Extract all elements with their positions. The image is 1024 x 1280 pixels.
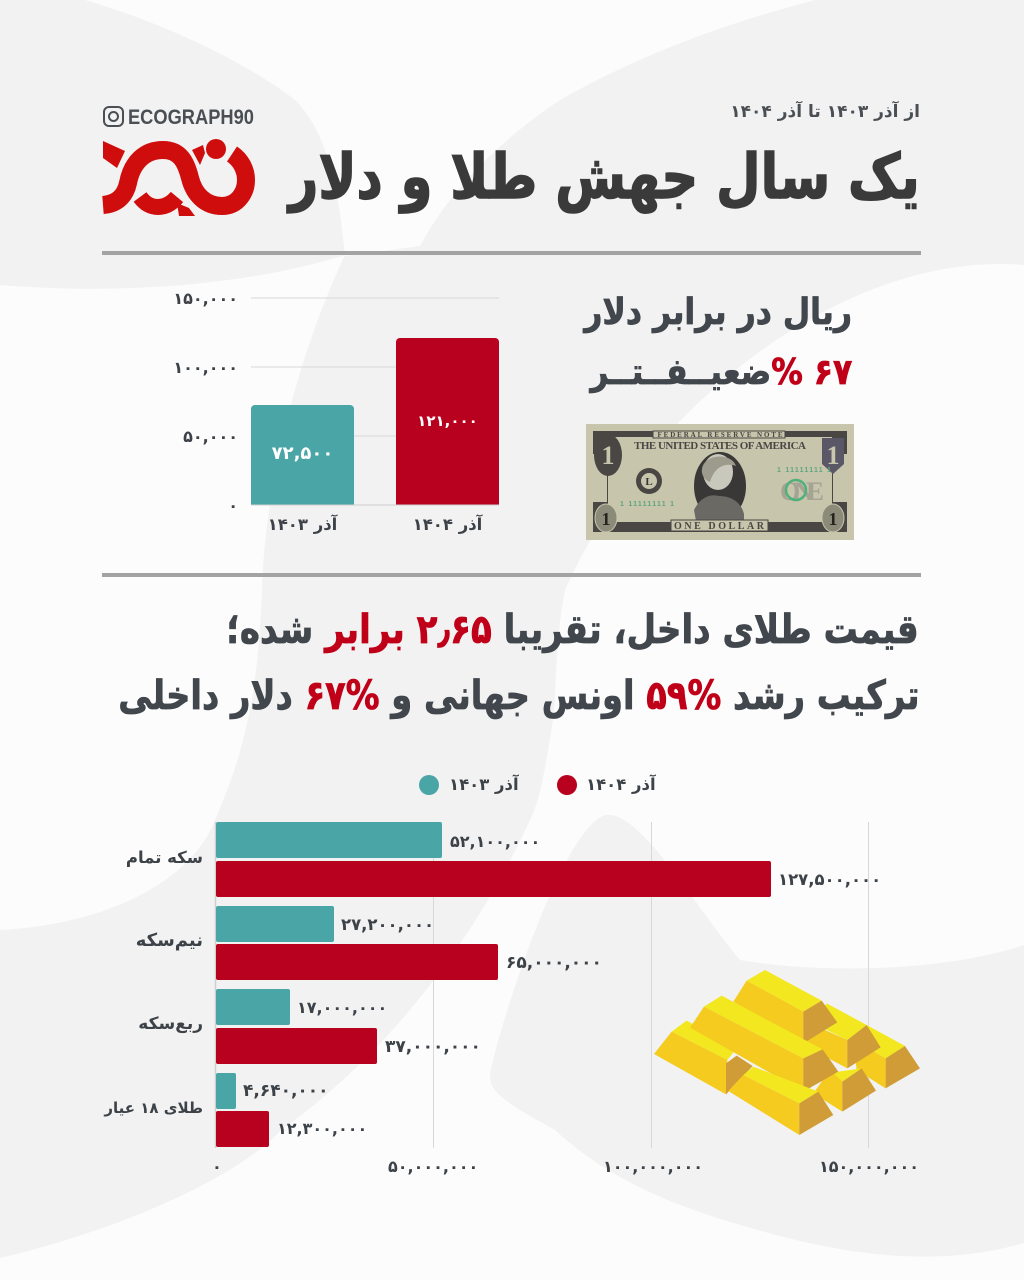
panel: rial vs dollar bar chart: ۱۰۰,۰۰۰ xyxy=(173,358,238,377)
axis labels: ۱۵۰,۰۰۰ xyxy=(173,289,238,308)
chart: gold prices horizontal bars: ۱۰۰,۰۰۰,۰۰۰ xyxy=(603,1157,703,1176)
bar: 1403 xyxy=(251,405,354,505)
chart: gold prices horizontal bars: ۴,۶۴۰,۰۰۰ xyxy=(243,1081,329,1101)
title: یک سال جهش طلا و دلار xyxy=(289,140,920,213)
date range subtitle: از آذر ۱۴۰۳ تا آذر ۱۴۰۴ xyxy=(730,102,920,122)
far right bar xyxy=(853,1025,905,1058)
legend xyxy=(419,774,656,795)
chart: gold prices horizontal bars: ۶۵,۰۰۰,۰۰۰ xyxy=(506,953,602,973)
chart: gold prices horizontal bars: ۱۵۰,۰۰۰,۰۰۰ xyxy=(819,1157,919,1176)
panel: rial vs dollar bar chart: ۰ xyxy=(228,496,238,515)
legend: آذر ۱۴۰۳ xyxy=(449,775,519,794)
icon: dollar bill: 1 xyxy=(602,509,610,529)
icon: dollar bill xyxy=(586,424,854,540)
legend 1403 xyxy=(419,775,439,795)
icon: dollar bill: 1 11111111 1 xyxy=(777,467,831,474)
chart: gold prices horizontal bars: ربع‌سکه xyxy=(138,1014,203,1034)
legend 1404 xyxy=(557,775,577,795)
chart: gold prices horizontal bars: ۲۷,۲۰۰,۰۰۰ xyxy=(341,915,434,934)
panel: rial vs dollar bar chart: ۵۰,۰۰۰ xyxy=(183,427,238,446)
chart: gold prices horizontal bars: ۵۰,۰۰۰,۰۰۰ xyxy=(388,1157,478,1176)
chart: gold prices horizontal bars: ۱۷,۰۰۰,۰۰۰ xyxy=(297,998,387,1017)
x axis labels: ۰ xyxy=(212,1157,222,1176)
legend: آذر ۱۴۰۴ xyxy=(586,775,656,794)
handle: instagram: ECOGRAPH90 xyxy=(128,106,254,129)
chart: gold prices horizontal bars: نیم‌سکه xyxy=(136,930,203,951)
chart: gold prices horizontal bars: طلای ۱۸ عیار xyxy=(104,1099,203,1117)
icon: dollar bill: 1 11111111 1 xyxy=(620,501,674,508)
icon: dollar bill: 1 xyxy=(828,509,838,529)
chart: gold prices horizontal bars: ۱۲۷,۵۰۰,۰۰۰ xyxy=(778,870,881,889)
value 1403: ۷۲,۵۰۰ xyxy=(272,443,333,464)
icon: dollar bill: L xyxy=(645,476,653,488)
logo xyxy=(102,139,255,216)
back middle bar xyxy=(813,1003,867,1040)
icon: dollar bill: FEDERAL RESERVE NOTE xyxy=(658,431,783,439)
icon: gold bars xyxy=(654,970,920,1135)
chart: gold prices horizontal bars: ۱۲,۳۰۰,۰۰۰ xyxy=(277,1119,367,1138)
front bar xyxy=(743,1067,818,1103)
icon: dollar bill: ONE DOLLAR xyxy=(674,521,765,532)
value labels: ۵۲,۱۰۰,۰۰۰ xyxy=(450,832,540,851)
panel: rial vs dollar bar chart xyxy=(173,289,499,534)
chart: gold prices horizontal bars: ۳۷,۰۰۰,۰۰۰ xyxy=(385,1037,481,1057)
long middle bar xyxy=(704,996,823,1058)
category 1403: آذر ۱۴۰۳ xyxy=(268,515,337,534)
icon: dollar bill: ONE xyxy=(780,477,824,506)
heading: gold price line 2: ترکیب رشد %۵۹ اونس جهانی و %۶۷ دلار داخلی xyxy=(118,673,919,719)
left low bar xyxy=(672,1021,737,1060)
callout: 67 percent weaker: ۶۷ %ضعیــفــتــر xyxy=(590,352,852,393)
bar: 1404 xyxy=(396,338,499,505)
chart: gold prices horizontal bars xyxy=(104,822,919,1176)
category 1404: آذر ۱۴۰۴ xyxy=(413,515,482,534)
front small bar xyxy=(830,1068,862,1082)
heading: gold price line 1: قیمت طلای داخل، تقریبا ۲٫۶۵ برابر شده؛ xyxy=(227,607,919,653)
icon: dollar bill: THE UNITED STATES OF AMERICA xyxy=(634,440,806,452)
top bar xyxy=(747,970,822,1012)
icon: dollar bill: 1 xyxy=(826,441,840,470)
category labels: سکه تمام xyxy=(126,848,203,867)
heading: rial against dollar: ریال در برابر دلار xyxy=(584,292,852,333)
icon: dollar bill: 1 xyxy=(602,441,614,470)
value 1404: ۱۲۱,۰۰۰ xyxy=(417,412,478,430)
